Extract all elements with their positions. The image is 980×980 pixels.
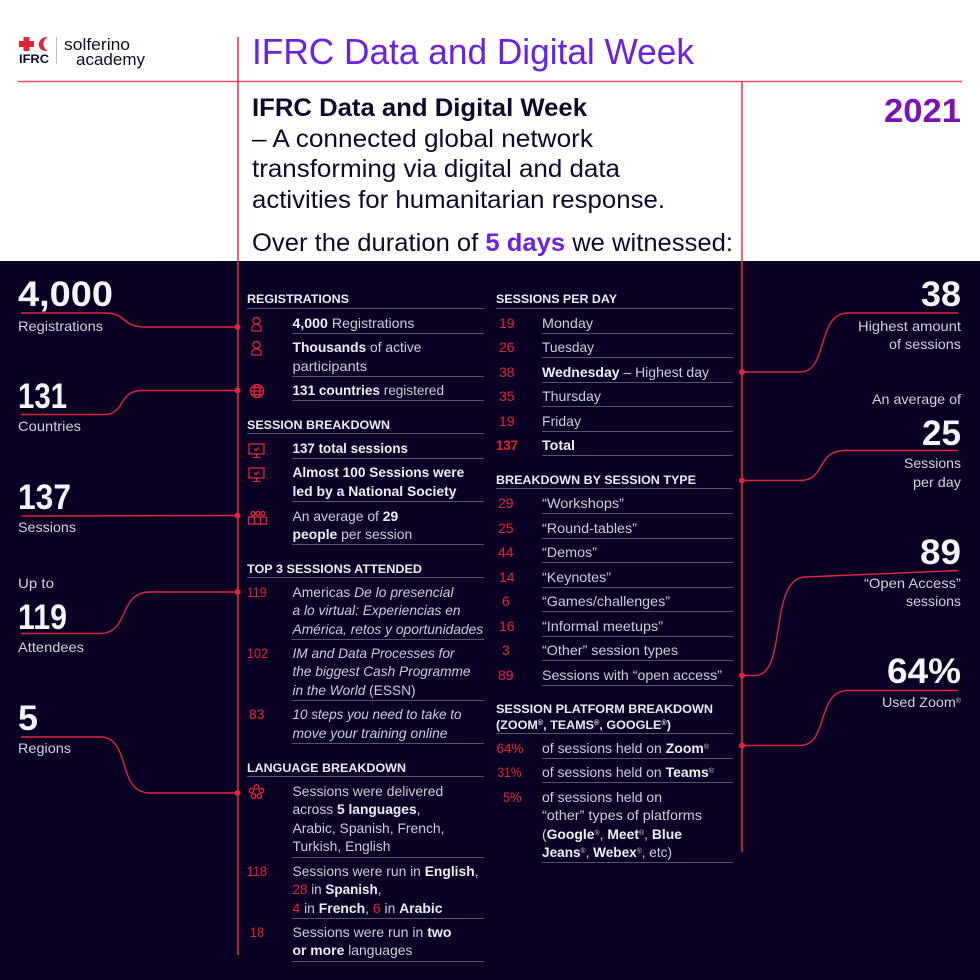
panel: top 3 sessions attended: América, retos y oportunidades [292,621,483,637]
panel: breakdown by session type: 3 [502,642,510,658]
intro text: IFRC Data and Digital Week [252,94,587,122]
panel: top 3 sessions attended [247,562,484,744]
panel: session platform breakdown: Jeans®, Webex®, etc) [542,844,672,860]
panel: session breakdown: 137 total sessions [292,440,408,456]
icon: group of people [248,512,266,524]
right stat: 89 open access: “Open Access” [864,575,961,591]
panel: breakdown by session type: “Workshops” [542,495,624,511]
right stat: 25 sessions per day: Sessions [904,455,961,471]
intro text: transforming via digital and data [252,155,620,183]
panel: language breakdown: 28 in Spanish, [292,881,382,897]
panel: top 3 sessions attended: 119 [247,584,267,600]
left stat: 137 sessions: 137 [18,478,71,517]
intro text: – A connected global network [252,125,594,153]
icon: globe [250,384,264,398]
panel: registrations: participants [292,358,367,374]
left stat: 131 countries: Countries [18,418,81,434]
panel: session breakdown: Almost 100 Sessions were [292,464,464,480]
panel: session breakdown: An average of 29 [292,508,398,524]
panel: registrations: Thousands of active [292,339,422,355]
panel: language breakdown: Turkish, English [292,838,390,854]
panel: breakdown by session type: “Keynotes” [542,569,611,585]
panel: breakdown by session type [496,473,733,686]
panel: sessions per day: 19 [499,315,515,331]
panel: breakdown by session type: 16 [499,618,515,634]
panel: sessions per day: Thursday [542,388,601,404]
logo: solferino academy [19,35,145,69]
left stat: 5 regions: 5 [18,699,38,738]
panel: session breakdown [247,418,484,544]
panel: language breakdown: or more languages [292,942,412,958]
panel: sessions per day: 38 [499,364,515,380]
panel: session platform breakdown: of sessions held on [542,789,662,805]
panel: breakdown by session type: 6 [502,593,510,609]
panel: breakdown by session type: 44 [498,544,514,560]
panel: top 3 sessions attended: 10 steps you need to take to [292,706,462,722]
left stat: 137 sessions: Sessions [18,519,76,535]
logo: solferino academy: solferino [64,35,130,54]
left stat: 4,000 registrations: 4,000 [18,275,113,314]
panel: breakdown by session type: “Informal meetups” [542,618,663,634]
panel: session platform breakdown: “other” types of platforms [542,807,702,823]
panel: session breakdown: led by a National Society [292,483,457,499]
icon: participant [252,342,261,355]
logo: solferino academy: IFRC [19,52,49,66]
panel: sessions per day: 35 [499,388,515,404]
panel: language breakdown: 118 [247,863,267,879]
panel: language breakdown: Sessions were run in English, [292,863,478,879]
panel: sessions per day: 137 [496,437,518,453]
panel: top 3 sessions attended: the biggest Cash Programme [292,663,471,679]
panel: language breakdown: 4 in French, 6 in Arabic [292,900,443,916]
icon: screen [249,444,264,458]
panel: sessions per day: Wednesday – Highest day [542,364,709,380]
right stat: 38 highest sessions: Highest amount [858,318,961,334]
panel: session platform breakdown: (ZOOM ®, TEAMS ®, GOOGLE ®) [496,718,671,732]
panel: session platform breakdown: 31% [498,764,522,780]
intro text [252,94,733,257]
intro text: Over the duration of 5 days we witnessed: [252,229,733,257]
panel: sessions per day: SESSIONS PER DAY [496,292,617,306]
panel: top 3 sessions attended: a lo virtual: Experiencias en [292,602,461,618]
panel: language breakdown: Sessions were run in two [292,924,452,940]
left stat: 119 attendees [18,575,240,655]
title: IFRC Data and Digital Week [252,31,695,72]
panel: breakdown by session type: “Games/challenges” [542,593,670,609]
panel: breakdown by session type: 89 [498,667,514,683]
right stat: 25 sessions per day: per day [913,474,961,490]
panel: sessions per day [496,292,733,456]
panel: sessions per day: Tuesday [542,339,594,355]
panel: breakdown by session type: “Demos” [542,544,597,560]
left stat: 5 regions: Regions [18,740,71,756]
panel: top 3 sessions attended: 83 [249,706,265,722]
panel: registrations: 4,000 Registrations [292,315,414,331]
panel: sessions per day: Total [542,437,575,453]
left stat: 131 countries: 131 [18,377,67,416]
icon: screen national society [249,468,264,482]
panel: registrations: 131 countries registered [292,382,444,398]
panel: session platform breakdown [496,702,733,862]
right stat: 25 sessions per day: 25 [922,414,961,453]
left stat: 4,000 registrations [18,275,240,334]
year: 2021 [884,92,961,129]
right stat: 64% used zoom: Used Zoom® [882,694,962,710]
left stat: 131 countries [18,377,240,434]
panel: language breakdown [247,761,484,962]
panel: session platform breakdown: (Google®, Meet®, Blue [542,826,682,842]
panel: session platform breakdown: of sessions held on Zoom® [542,740,710,756]
panel: session platform breakdown: 5% [503,789,522,805]
left stat: 4,000 registrations: Registrations [18,318,103,334]
right stat: 89 open access: 89 [920,533,961,572]
panel: top 3 sessions attended: move your training online [292,725,448,741]
right stat: 38 highest sessions: of sessions [889,336,961,352]
panel: top 3 sessions attended: TOP 3 SESSIONS ATTENDED [247,562,422,576]
panel: language breakdown: Arabic, Spanish, French, [292,820,444,836]
right stat: 38 highest sessions: 38 [921,275,961,314]
left stat: 119 attendees: Attendees [18,639,84,655]
right stat: 64% used zoom: 64% [887,652,961,691]
panel: session platform breakdown: of sessions held on Teams® [542,764,715,780]
panel: language breakdown: across 5 languages, [292,801,420,817]
right stat: 25 sessions per day: An average of [872,391,961,407]
panel: breakdown by session type: 14 [499,569,515,585]
panel: breakdown by session type: 25 [498,520,514,536]
panel: top 3 sessions attended: in the World (ESSN) [292,682,416,698]
panel: top 3 sessions attended: IM and Data Processes for [292,645,456,661]
right stat: 89 open access: sessions [906,593,961,609]
panel: breakdown by session type: 29 [498,495,514,511]
left stat: 119 attendees: Up to [18,575,54,591]
panel: language breakdown: Sessions were delivered [292,783,443,799]
icon: language flower [249,785,264,798]
panel: sessions per day: Friday [542,413,581,429]
right stat: 64% used zoom [739,652,962,748]
panel: sessions per day: 26 [499,339,515,355]
left stat: 137 sessions [18,478,240,535]
intro text: activities for humanitarian response. [252,186,665,214]
left stat: 5 regions [18,699,240,796]
panel: session breakdown: people per session [292,526,412,542]
logo: solferino academy: academy [76,50,145,69]
right stat: 38 highest sessions [739,275,961,375]
panel: language breakdown: 18 [250,924,264,940]
dark background panel [0,261,980,980]
right stat: 89 open access [739,533,961,678]
icon: user registration [252,318,261,331]
panel: registrations: REGISTRATIONS [247,292,349,306]
panel: session platform breakdown: 64% [496,740,524,756]
panel: sessions per day: 19 [499,413,515,429]
panel: session platform breakdown: SESSION PLATFORM BREAKDOWN [496,702,713,716]
panel: registrations [247,292,484,400]
right stat: 25 sessions per day [739,391,961,490]
panel: language breakdown: LANGUAGE BREAKDOWN [247,761,406,775]
panel: session breakdown: SESSION BREAKDOWN [247,418,390,432]
panel: breakdown by session type: “Round-tables” [542,520,637,536]
left stat: 119 attendees: 119 [18,598,67,637]
panel: sessions per day: Monday [542,315,593,331]
panel: breakdown by session type: BREAKDOWN BY SESSION TYPE [496,473,696,487]
panel: breakdown by session type: Sessions with “open access” [542,667,722,683]
panel: breakdown by session type: “Other” session types [542,642,678,658]
panel: top 3 sessions attended: Americas De lo presencial [292,584,454,600]
panel: top 3 sessions attended: 102 [247,645,268,661]
